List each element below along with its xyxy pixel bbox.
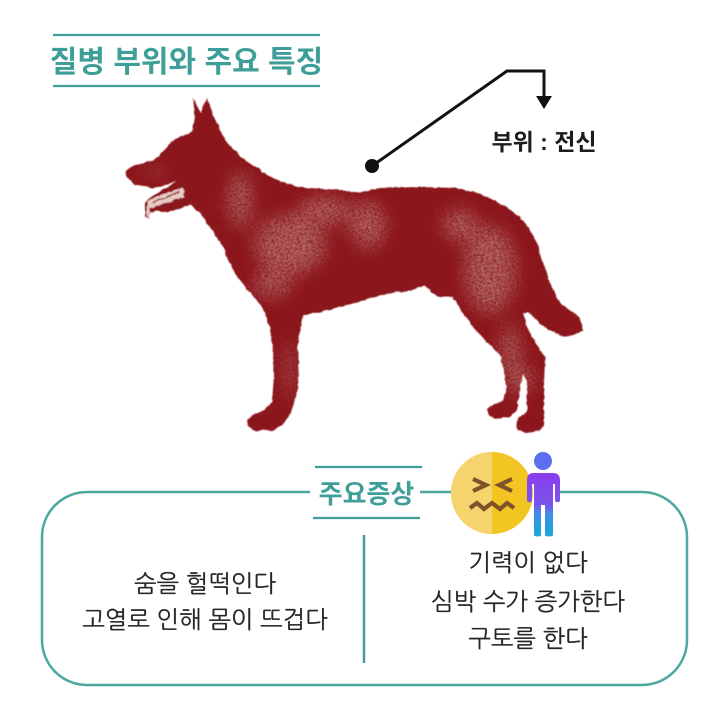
symptoms: right column: 기력이 없다 <box>468 550 588 577</box>
heading: main symptoms <box>313 467 422 518</box>
symptoms: left column <box>82 571 328 634</box>
symptoms: right column <box>431 550 625 653</box>
divider <box>363 535 365 663</box>
pointer arrow <box>365 71 552 173</box>
panel: main symptoms <box>42 492 687 685</box>
icon: person <box>527 452 560 536</box>
symptoms: left column: 고열로 인해 몸이 뜨겁다 <box>82 607 328 634</box>
symptoms: right column: 심박 수가 증가한다 <box>431 589 625 616</box>
illustration: red dog <box>120 95 590 435</box>
symptoms: right column: 구토를 한다 <box>468 626 588 653</box>
heading: main symptoms: 주요증상 <box>319 479 414 509</box>
symptoms: left column: 숨을 헐떡인다 <box>134 571 276 598</box>
icon: sick face <box>451 452 533 534</box>
dog mouth and tongue <box>146 188 184 218</box>
label: affected site: 부위 : 전신 <box>491 129 597 155</box>
title: 질병 부위와 주요 특징 <box>50 46 323 79</box>
